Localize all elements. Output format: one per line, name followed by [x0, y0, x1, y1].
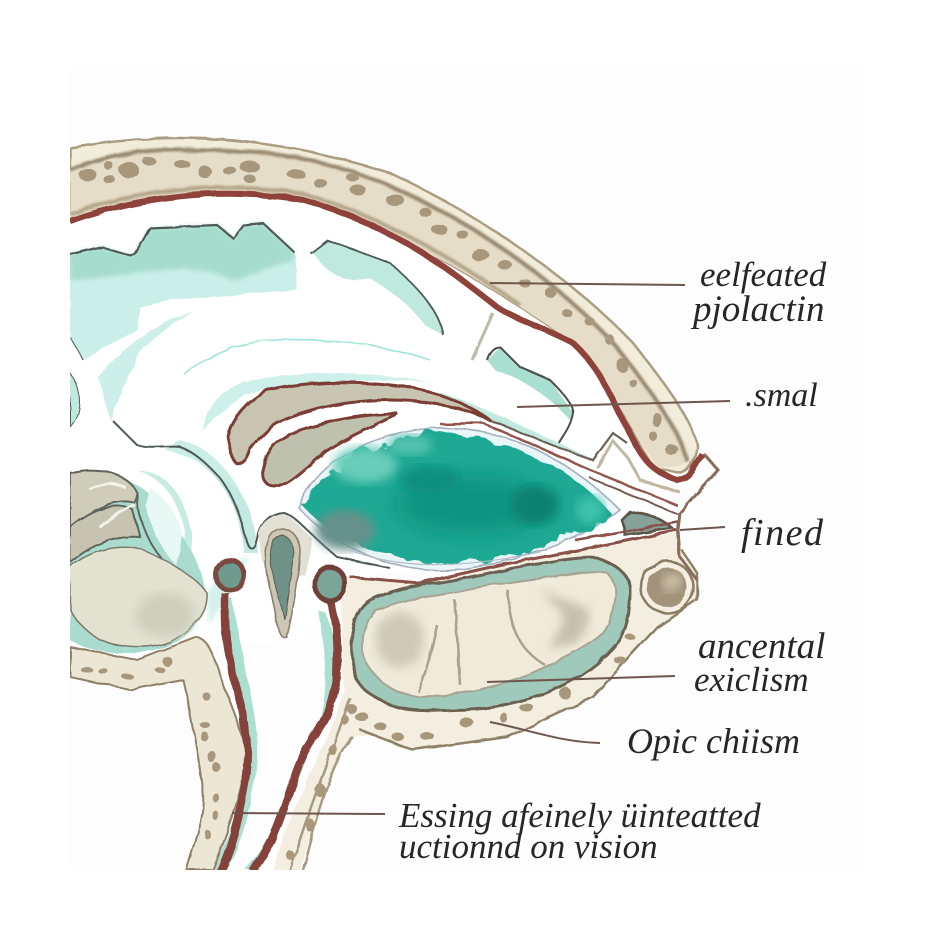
teal cortical patches	[70, 223, 443, 430]
red vessels	[216, 560, 345, 872]
label: exiclism: exiclism	[694, 660, 809, 699]
pituitary gland	[352, 558, 630, 711]
white brain interior	[70, 193, 690, 660]
bone pores	[79, 157, 679, 455]
round sinus	[641, 561, 693, 613]
label: prolactin: pjolactin	[690, 289, 825, 330]
duct and nasal tip	[575, 453, 718, 580]
small teal blob with wedge	[440, 313, 680, 515]
left lobe	[70, 470, 207, 653]
label: ancental: ancental	[698, 626, 825, 667]
label: fined: fined	[741, 512, 824, 554]
central teal lesion	[298, 428, 620, 571]
anatomical illustration	[70, 136, 826, 870]
soft teal around lobes	[137, 440, 258, 625]
paper panel	[70, 70, 865, 870]
teal beside vessels	[214, 598, 258, 870]
lower cream bone region	[273, 533, 697, 870]
skull bone band	[70, 138, 697, 472]
red meningeal line	[70, 194, 702, 480]
leader lines	[232, 283, 730, 814]
label: optic chiasm: Opic chiism	[627, 721, 800, 761]
label: elevated prolactin: eelfeated	[700, 255, 827, 294]
central stalk	[266, 529, 300, 638]
corpus callosum arcs	[228, 382, 490, 487]
caption line 2: uctionnd on vision	[399, 827, 658, 866]
label: small: .smal	[745, 377, 818, 414]
lower bone pores	[286, 634, 635, 860]
caption line 1: Essing afeinely üinteatted	[398, 796, 761, 835]
lower-left bone below lobe	[70, 637, 246, 870]
brain base outline	[112, 420, 390, 568]
